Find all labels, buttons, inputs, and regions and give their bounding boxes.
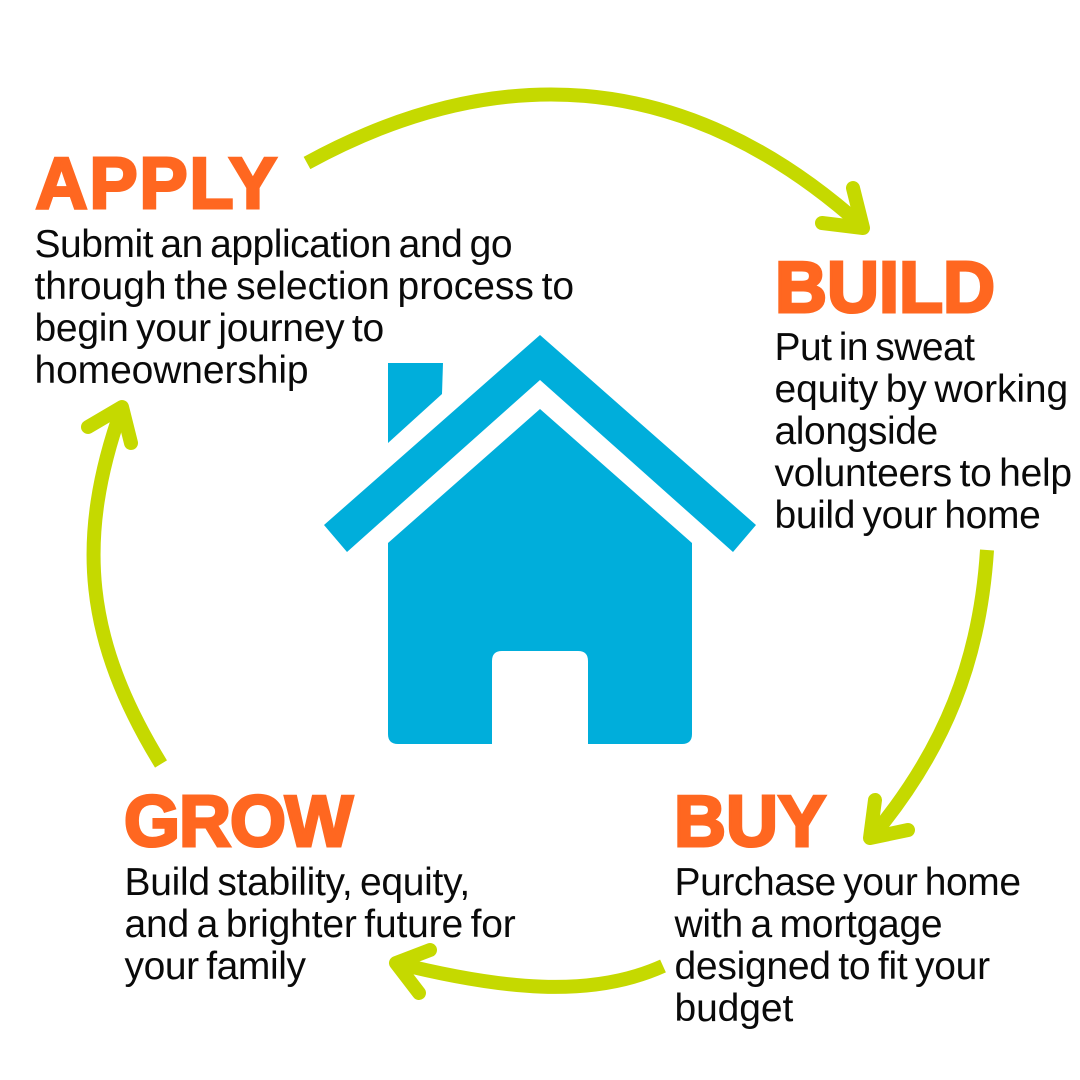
text: build: equity by working <box>774 368 1068 411</box>
arrow: apply to build <box>307 94 863 228</box>
text: build: Put in sweat <box>774 326 974 369</box>
text: grow: Build stability, equity, <box>124 861 470 904</box>
arrow: build to buy <box>870 550 987 838</box>
text: buy: designed to fit your <box>674 945 990 988</box>
text: build: alongside <box>774 410 938 453</box>
text: grow: and a brighter future for <box>124 903 516 946</box>
text: buy: Purchase your home <box>674 861 1021 904</box>
text: build <box>774 326 1072 537</box>
text: build: build your home <box>774 494 1040 537</box>
text: apply: begin your journey to <box>34 307 384 350</box>
text: apply <box>34 223 574 392</box>
text: apply: homeownership <box>34 349 309 392</box>
arrow: buy to grow <box>396 950 663 993</box>
arrow: grow to apply <box>88 407 161 764</box>
text: build: volunteers to help <box>774 452 1072 495</box>
heading: build: BUILD <box>775 248 995 328</box>
text: buy: budget <box>674 987 793 1030</box>
heading: buy: BUY <box>674 782 826 862</box>
heading: grow: GROW <box>124 782 352 862</box>
text: buy: with a mortgage <box>674 903 942 946</box>
heading: apply: APPLY <box>36 144 279 224</box>
text: apply: through the selection process to <box>34 265 574 308</box>
text: apply: Submit an application and go <box>34 223 512 266</box>
text: buy <box>674 861 1021 1030</box>
text: grow: your family <box>124 945 306 988</box>
text: grow <box>124 861 516 988</box>
